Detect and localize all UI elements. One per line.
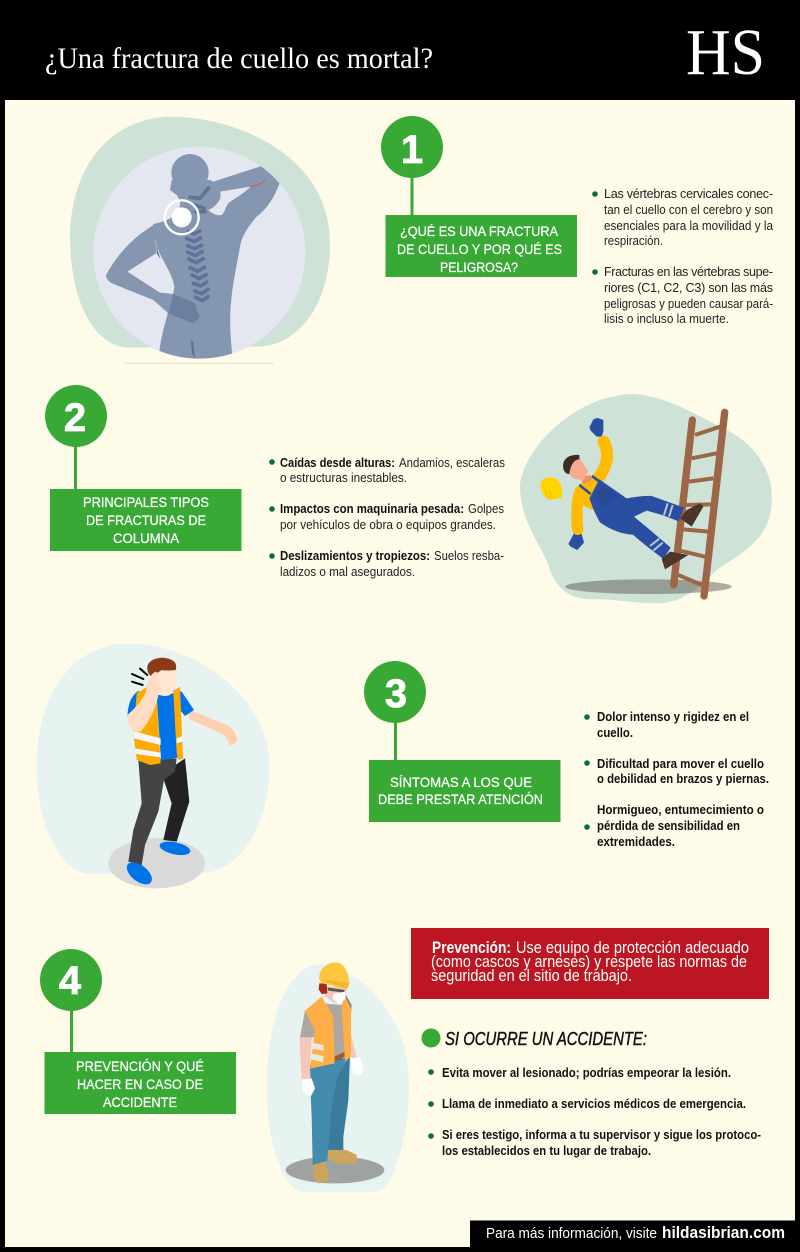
- section 3 heading box: SÍNTOMAS A LOS QUE: [390, 774, 532, 790]
- section 1 bullet list: riores (C1, C2, C3) son las más: [604, 281, 773, 295]
- footer: hildasibrian.com: [662, 1223, 785, 1242]
- section 3 bullet list: pérdida de sensibilidad en: [597, 819, 740, 833]
- footer: Para más información, visite: [486, 1225, 657, 1242]
- section 3 bullet list: [584, 710, 769, 849]
- section 2 bullet list: ladizos o mal asegurados.: [280, 565, 415, 579]
- prevention callout: (como cascos y arneses) y respete las normas de: [431, 953, 747, 971]
- section 1 number badge: 1: [401, 128, 423, 172]
- prevention callout: seguridad en el sitio de trabajo.: [431, 967, 632, 985]
- section 2 bullet list: Golpes: [468, 502, 504, 516]
- section 2 bullet list: Caídas desde alturas:: [280, 456, 395, 470]
- section 3 bullet list: o debilidad en brazos y piernas.: [597, 772, 769, 786]
- prevention callout: [411, 928, 769, 999]
- illustration: worker with protective equipment: [267, 962, 409, 1192]
- section 2 bullet list: por vehículos de obra o equipos grandes.: [280, 518, 496, 532]
- section 1 bullet list: Las vértebras cervicales conec-: [604, 187, 773, 201]
- illustration: worker with neck pain: [37, 643, 269, 889]
- accident bullet list: Llama de inmediato a servicios médicos de emergencia.: [442, 1097, 746, 1111]
- section 1 number badge: [381, 116, 443, 216]
- section 2 bullet list: o estructuras inestables.: [280, 471, 407, 485]
- logo HS: HS: [686, 16, 765, 89]
- accident bullet list: Si eres testigo, informa a tu supervisor y sigue los protoco-: [442, 1128, 761, 1142]
- section 4 heading box: ACCIDENTE: [103, 1094, 177, 1110]
- accident bullet list: los establecidos en tu lugar de trabajo.: [442, 1144, 651, 1158]
- section 4 number badge: 4: [59, 959, 82, 1003]
- title: ¿Una fractura de cuello es mortal?: [45, 42, 433, 75]
- section 1 bullet list: respiración.: [604, 234, 663, 248]
- section 4 heading box: HACER EN CASO DE: [77, 1076, 203, 1092]
- section 1 heading box: [386, 215, 577, 277]
- illustration: man with neck and spine pain: [70, 117, 330, 363]
- section 2 heading box: PRINCIPALES TIPOS: [83, 494, 209, 510]
- section 3 bullet list: extremidades.: [597, 835, 675, 849]
- section 2 bullet list: Deslizamientos y tropiezos:: [280, 549, 430, 563]
- section 2 bullet list: [269, 456, 505, 579]
- accident bullet list: [428, 1066, 761, 1158]
- section 2 heading box: COLUMNA: [113, 530, 180, 546]
- section 1 bullet list: peligrosas y pueden causar pará-: [604, 297, 773, 311]
- prevention callout: Prevención:: [432, 939, 511, 957]
- section 1 heading box: ¿QUÉ ES UNA FRACTURA: [400, 223, 559, 239]
- section 1 bullet list: [592, 187, 773, 326]
- illustration: worker falling from ladder: [520, 394, 772, 603]
- section 3 bullet list: Hormigueo, entumecimiento o: [597, 803, 764, 817]
- section 1 bullet list: tan el cuello con el cerebro y son: [604, 203, 773, 217]
- section 2 number badge: 2: [64, 396, 86, 440]
- section 3 number badge: 3: [385, 672, 407, 716]
- section 1 heading box: DE CUELLO Y POR QUÉ ES: [397, 241, 562, 257]
- section 2 heading box: [50, 489, 242, 551]
- section 4 heading box: PREVENCIÓN Y QUÉ: [76, 1058, 204, 1074]
- section 4 heading box: [44, 1052, 236, 1114]
- section 1 bullet list: esenciales para la movilidad y la: [604, 219, 773, 233]
- footer: [470, 1220, 800, 1252]
- section 2 bullet list: Andamios, escaleras: [399, 456, 505, 470]
- spine: [187, 188, 208, 301]
- section 1 bullet list: Fracturas en las vértebras supe-: [604, 265, 773, 279]
- section 2 heading box: DE FRACTURAS DE: [86, 512, 206, 528]
- accident bullet list: Evita mover al lesionado; podrías empeorar la lesión.: [442, 1066, 731, 1080]
- section 3 heading box: [369, 760, 560, 822]
- section 3 heading box: DEBE PRESTAR ATENCIÓN: [378, 791, 543, 807]
- section 1 heading box: PELIGROSA?: [440, 259, 518, 275]
- section 2 bullet list: Impactos con maquinaria pesada:: [280, 502, 464, 516]
- prevention callout: Use equipo de protección adecuado: [516, 939, 749, 957]
- section 3 bullet list: Dificultad para mover el cuello: [597, 757, 764, 771]
- section 3 bullet list: Dolor intenso y rigidez en el: [597, 710, 749, 724]
- accident heading: SI OCURRE UN ACCIDENTE:: [445, 1029, 647, 1049]
- section 2 bullet list: Suelos resba-: [434, 549, 504, 563]
- section 2 number badge: [45, 385, 107, 490]
- section 4 number badge: [40, 949, 102, 1053]
- section 3 bullet list: cuello.: [597, 726, 633, 740]
- section 1 bullet list: lisis o incluso la muerte.: [604, 312, 729, 326]
- section 3 number badge: [364, 661, 426, 761]
